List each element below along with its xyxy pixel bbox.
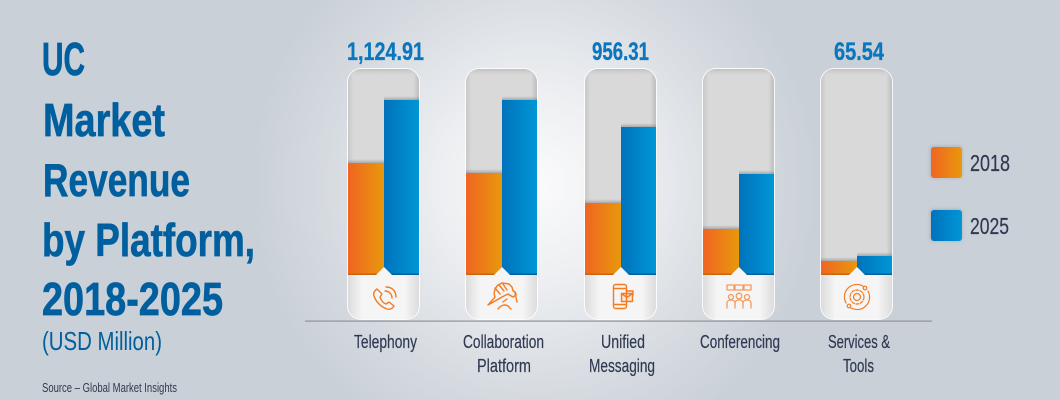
legend: 2018: 2018 xyxy=(970,150,1010,176)
source note: Source – Global Market Insights xyxy=(42,380,177,395)
icon: handshake xyxy=(488,283,517,309)
bar: 2018 xyxy=(821,261,857,274)
title: 2018-2025 xyxy=(42,273,223,325)
title: UC xyxy=(42,33,85,85)
column: Telephony xyxy=(347,68,420,320)
bar: 2018 xyxy=(348,163,384,275)
bar: 2025 xyxy=(857,256,892,275)
bar: 2025 xyxy=(621,127,656,275)
category label: Collaboration Platform xyxy=(463,331,544,376)
icon: phone with message xyxy=(614,284,633,308)
baseline axis xyxy=(305,320,932,322)
category label: Unified Messaging xyxy=(589,331,655,376)
category label: Collaboration Platform: Collaboration xyxy=(463,331,544,352)
bar: 2025 xyxy=(384,100,419,275)
subtitle: unit: (USD Million) xyxy=(42,326,162,356)
icon: telephone xyxy=(374,287,396,309)
value label: Unified Messaging: 956.31 xyxy=(592,38,649,66)
bar: 2025 xyxy=(502,100,537,275)
value label: Services and Tools: 65.54 xyxy=(834,38,884,66)
title: Market xyxy=(43,94,165,146)
category label: Telephony: Telephony xyxy=(354,331,418,352)
bar: 2018 xyxy=(703,229,739,275)
category label: Services and Tools: Services & xyxy=(828,331,890,352)
icon: gear with orbit xyxy=(844,284,870,310)
bar: 2018 xyxy=(585,203,621,275)
legend: 2025 xyxy=(930,209,1009,241)
column: Conferencing xyxy=(702,68,775,320)
title: by Platform, xyxy=(42,214,255,266)
bar: 2025 xyxy=(739,174,774,275)
category label: Unified Messaging: Messaging xyxy=(589,355,655,376)
column: Services and Tools xyxy=(820,68,893,320)
category label: Unified Messaging: Unified xyxy=(601,331,645,352)
bar: 2018 xyxy=(466,173,502,275)
icon: conference group xyxy=(727,285,751,308)
category label: Services and Tools: Tools xyxy=(843,355,874,376)
title: Revenue xyxy=(43,154,190,206)
column: Unified Messaging xyxy=(584,68,657,320)
category label: Collaboration Platform: Platform xyxy=(477,355,531,376)
legend: 2018 xyxy=(930,146,1010,178)
value label: Telephony: 1,124.91 xyxy=(347,38,424,66)
legend: 2025: 2025 xyxy=(970,213,1009,239)
category label: Services and Tools xyxy=(828,331,890,376)
category label: Conferencing: Conferencing xyxy=(700,331,780,352)
column: Collaboration Platform xyxy=(465,68,538,320)
title xyxy=(42,33,255,325)
